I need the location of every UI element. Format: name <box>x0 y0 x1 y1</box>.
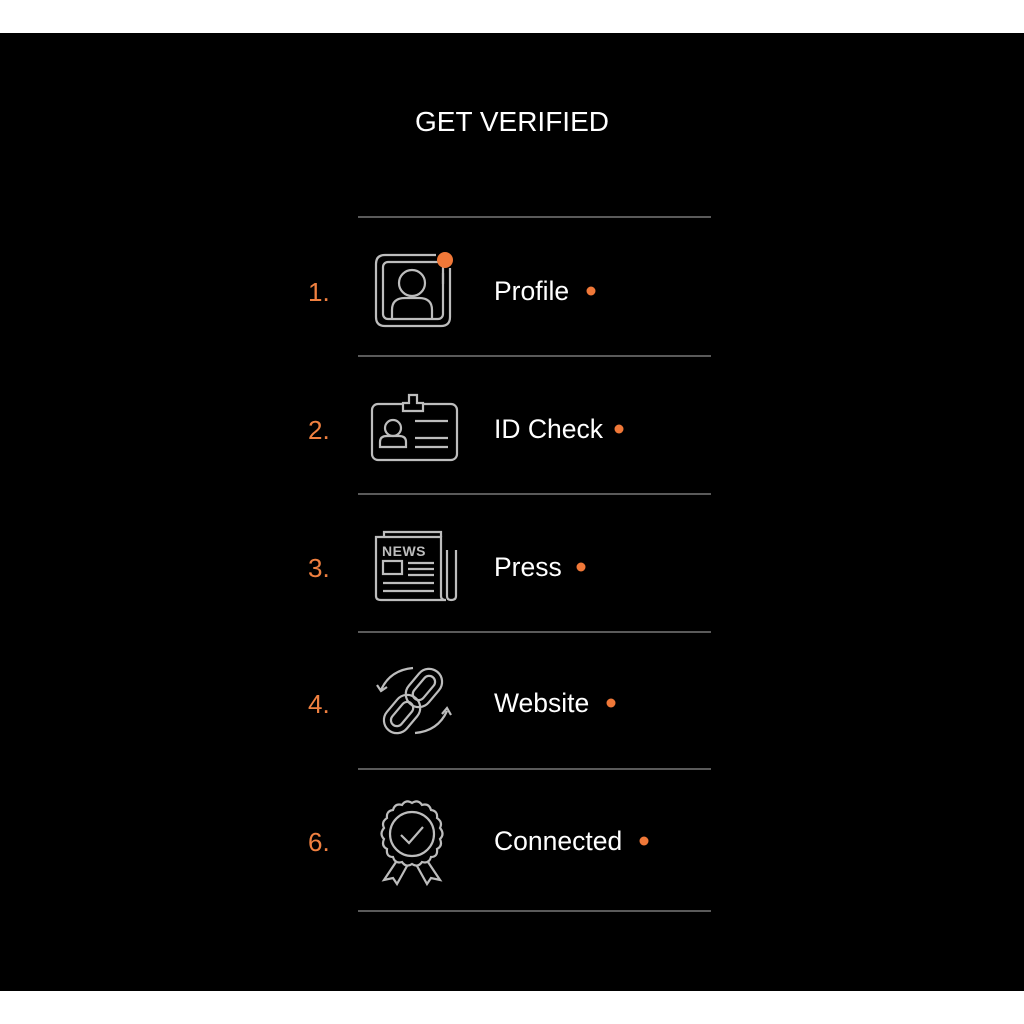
step 4: website: Website <box>494 688 589 718</box>
step 3: press: NEWS <box>382 543 426 559</box>
title: GET VERIFIED <box>415 106 609 137</box>
icon: id card <box>372 395 457 460</box>
step 6: connected: 6. <box>308 827 330 857</box>
icon: newspaper <box>376 532 456 600</box>
step 4: website <box>308 664 616 738</box>
step 1: profile <box>308 252 596 326</box>
step 1: profile: 1. <box>308 277 330 307</box>
step 3: press: 3. <box>308 553 330 583</box>
step 2: ID check: ID Check <box>494 414 604 444</box>
step 4: website: 4. <box>308 689 330 719</box>
step 2: ID check <box>308 395 624 460</box>
step 3: press: Press <box>494 552 562 582</box>
icon: profile <box>376 255 450 326</box>
step 6: connected: Connected <box>494 826 622 856</box>
step 6: connected <box>308 801 648 884</box>
icon: link <box>377 664 451 738</box>
step 2: ID check: 2. <box>308 415 330 445</box>
step 1: profile: Profile <box>494 276 569 306</box>
icon: badge <box>382 801 442 884</box>
step 3: press <box>308 532 586 600</box>
